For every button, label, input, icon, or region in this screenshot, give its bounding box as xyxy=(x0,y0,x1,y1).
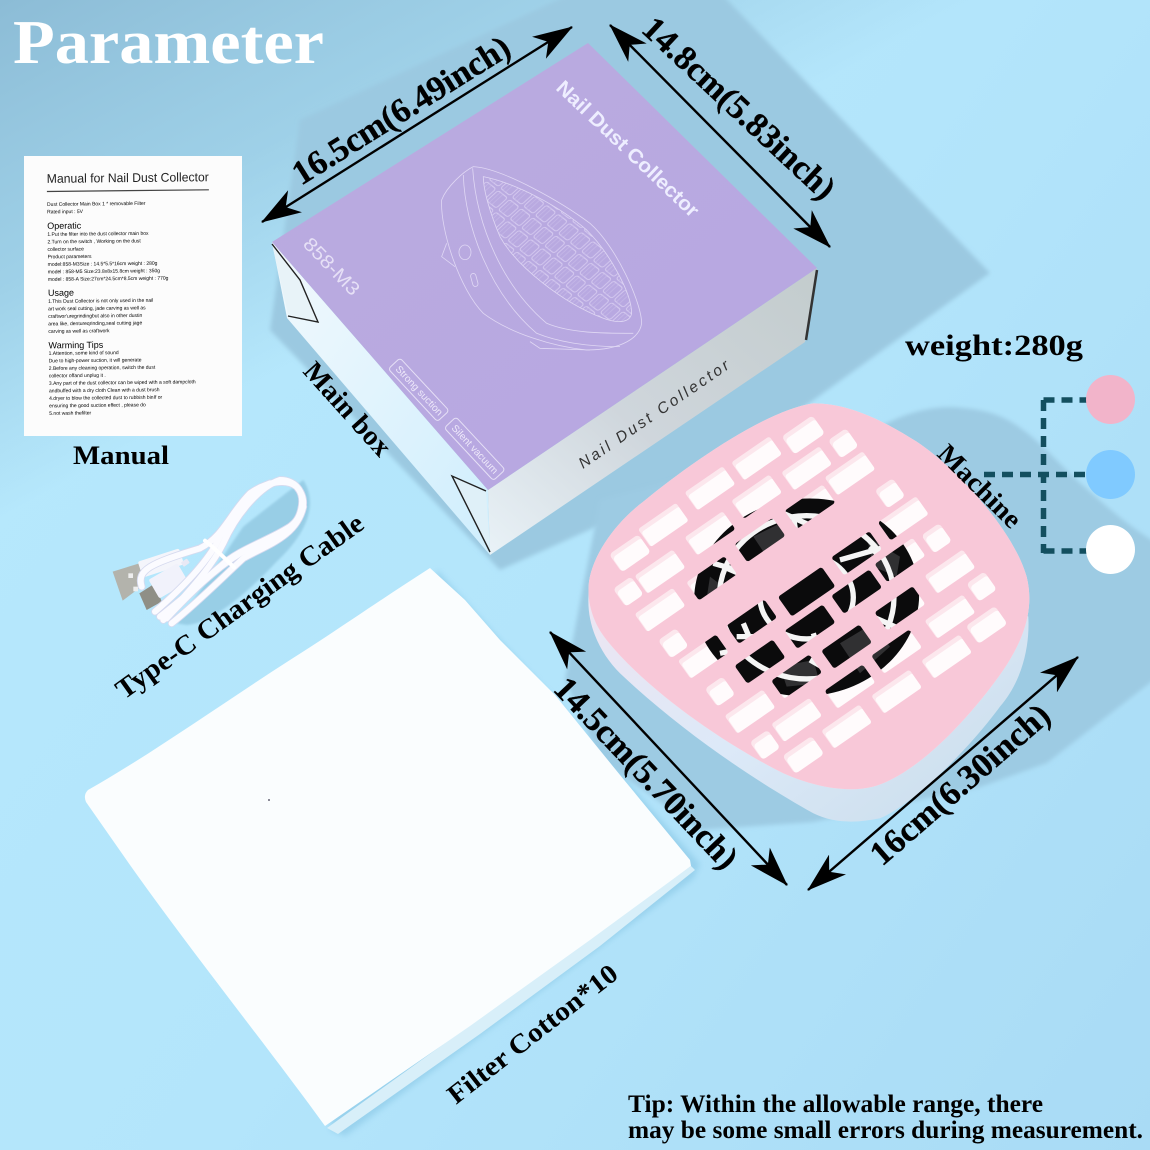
box left face xyxy=(272,242,490,555)
panel: manual sheet: andbuffed with a dry cloth Clean with a dust brush xyxy=(49,387,160,394)
panel: manual sheet: Dust Collector Main Box 1 * removable Filter xyxy=(47,201,146,208)
panel: manual sheet: 1.Put the filter into the dust collector main box xyxy=(47,231,149,238)
charging cable xyxy=(113,480,310,625)
model number: 858-M3 xyxy=(298,234,364,300)
panel: manual sheet: Due to high-power suction, it will generate xyxy=(49,357,142,364)
title: Parameter xyxy=(13,9,324,77)
panel: manual sheet: art work seal cutting, jade carving as well as xyxy=(48,305,146,312)
main box xyxy=(272,43,817,555)
box top title: Nail Dust Collector xyxy=(552,77,703,222)
box front face xyxy=(488,268,817,555)
panel: manual sheet: collector offand unplug it . xyxy=(49,373,106,379)
panel: manual sheet: 1.This Dust Collector is not only used in the nail xyxy=(48,298,153,305)
panel: manual sheet: 2.Before any cleaning operation, switch the dust xyxy=(49,365,156,372)
panel: manual sheet: Rated input : 5V xyxy=(47,209,84,215)
dimension: machine width xyxy=(546,632,787,885)
machine: dust collector xyxy=(588,403,1029,822)
panel: manual sheet: 5.not wash thefilter xyxy=(49,410,92,417)
panel: manual sheet: carving as well as craftwork xyxy=(48,328,110,335)
badge: silent vacuum: Silent vacuum xyxy=(449,423,500,476)
dimension: box length xyxy=(262,27,572,222)
panel: manual sheet: Warming Tips xyxy=(48,340,104,350)
panel: manual sheet: model : 858-M5 Size:23.8x8x15.8cm weight : 350g xyxy=(48,268,160,275)
panel: manual sheet: 2.Turn on the switch , Working on the dust xyxy=(47,238,141,245)
panel: manual sheet: Product parameters xyxy=(48,254,92,260)
panel: manual sheet: model : 858-A Size:27cm*24.5cm*8.5cm weight : 770g xyxy=(48,276,169,283)
panel: manual sheet: model:858-M3Size : 14.5*5.5*16cm weight : 280g xyxy=(48,261,158,268)
dimension: machine length: 16cm(6.30inch) xyxy=(863,697,1058,873)
panel: manual sheet: area like, dentureqrinding,seal cutting jage xyxy=(48,320,142,327)
machine label: Machine xyxy=(932,438,1028,534)
filter cotton xyxy=(85,568,700,1136)
badge: strong suction: Strong suction xyxy=(393,364,444,418)
measurement tip: may be some small errors during measurement. xyxy=(628,1117,1143,1144)
dimension: box width: 14.8cm(5.83inch) xyxy=(635,10,843,207)
grid cover xyxy=(589,403,1029,789)
collector line drawing xyxy=(442,167,642,350)
USB plug xyxy=(113,563,143,601)
box top face xyxy=(272,43,817,490)
collector base xyxy=(588,490,1029,822)
dimension: box length: 16.5cm(6.49inch) xyxy=(286,29,517,193)
panel: manual sheet: Operatic xyxy=(47,221,82,231)
panel: manual sheet: 3.Any part of the dust collector can be wiped with a soft dampcloth xyxy=(49,379,196,387)
dimension: machine width: 14.5cm(5.70inch) xyxy=(546,670,745,877)
weight label: weight:280g xyxy=(905,329,1083,362)
panel: manual sheet: 1.Attention, some kind of sound xyxy=(49,350,119,357)
panel: manual sheet: Manual for Nail Dust Collector xyxy=(47,170,209,186)
cable label: Type-C Charging Cable xyxy=(110,508,370,706)
measurement tip xyxy=(628,1091,1143,1144)
panel: manual sheet: collector surface xyxy=(47,247,84,253)
dimension: machine length xyxy=(808,657,1078,890)
panel: manual sheet xyxy=(24,156,242,436)
panel: manual sheet: Usage xyxy=(48,288,74,298)
filter label: Filter Cotton*10 xyxy=(441,958,624,1110)
colour options xyxy=(984,375,1135,574)
fan xyxy=(684,487,929,707)
main box label: Main box xyxy=(297,356,397,463)
panel: manual sheet: craftwor'uregrindingbut also in other dustin xyxy=(48,313,143,320)
panel: manual sheet: ensuring the good suction effect , please do xyxy=(49,402,146,409)
box side label: Nail Dust Collector xyxy=(576,356,734,472)
panel: manual sheet: 4.dryer to blow the collected dust to rubbish binIf or xyxy=(49,395,163,402)
measurement tip: Tip: Within the allowable range, there xyxy=(628,1091,1043,1118)
manual label: Manual xyxy=(73,441,169,470)
hole backing xyxy=(589,403,1029,789)
